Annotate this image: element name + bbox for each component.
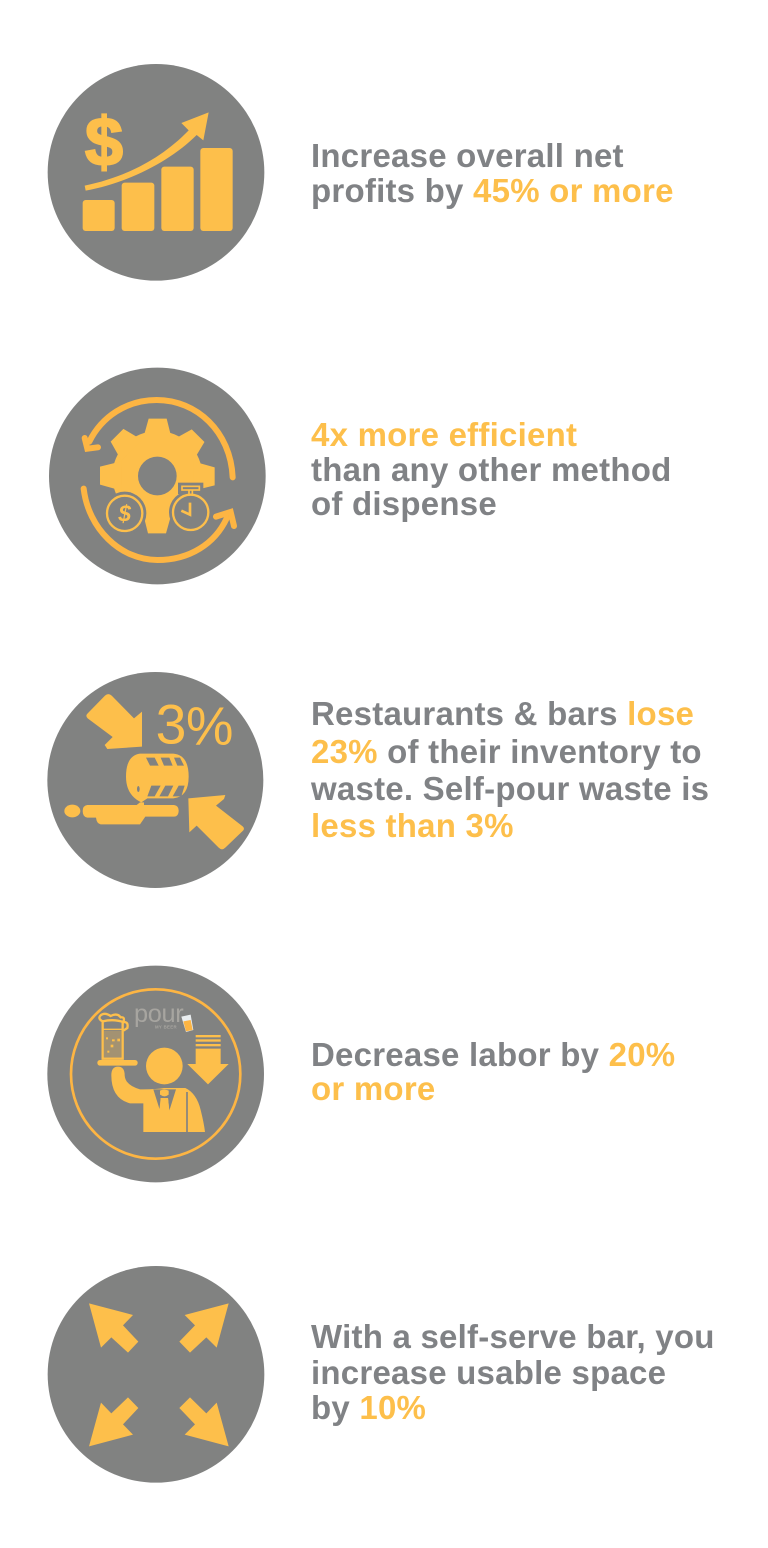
icon: profit growth chart — [48, 64, 264, 281]
icon: four outward arrows — [48, 1266, 264, 1483]
icon: waiter with beer tray: pour — [134, 1000, 184, 1028]
text: labor: Decrease labor by 20% — [311, 1036, 675, 1073]
icon: gear with cycle arrows: $ — [117, 500, 131, 526]
text: efficiency: than any other method — [311, 451, 672, 488]
text: waste: Restaurants & bars lose — [311, 695, 694, 732]
text: waste: less than 3% — [311, 807, 514, 844]
text: usable space: by 10% — [311, 1389, 426, 1426]
text: net profits: profits by 45% or more — [311, 172, 674, 209]
icon: spilled barrel with 3 percent: 3 — [156, 694, 186, 756]
text: waste: 23% of their inventory to — [311, 733, 702, 770]
text: waste: waste. Self-pour waste is — [310, 770, 709, 807]
icon: profit growth chart: $ — [85, 104, 123, 180]
text: efficiency: 4x more efficient — [311, 416, 577, 453]
icon: spilled barrel with 3 percent: % — [186, 697, 233, 756]
icon: waiter with beer tray — [47, 966, 264, 1182]
icon: spilled barrel with 3 percent — [47, 672, 263, 888]
text: labor: or more — [311, 1070, 435, 1107]
text: net profits: Increase overall net — [311, 137, 624, 174]
icon: gear with cycle arrows — [49, 368, 266, 584]
text: usable space: increase usable space — [311, 1354, 666, 1391]
text: usable space: With a self-serve bar, you — [311, 1318, 715, 1355]
icon: waiter with beer tray: MY BEER — [155, 1025, 178, 1030]
text: efficiency: of dispense — [311, 485, 497, 522]
